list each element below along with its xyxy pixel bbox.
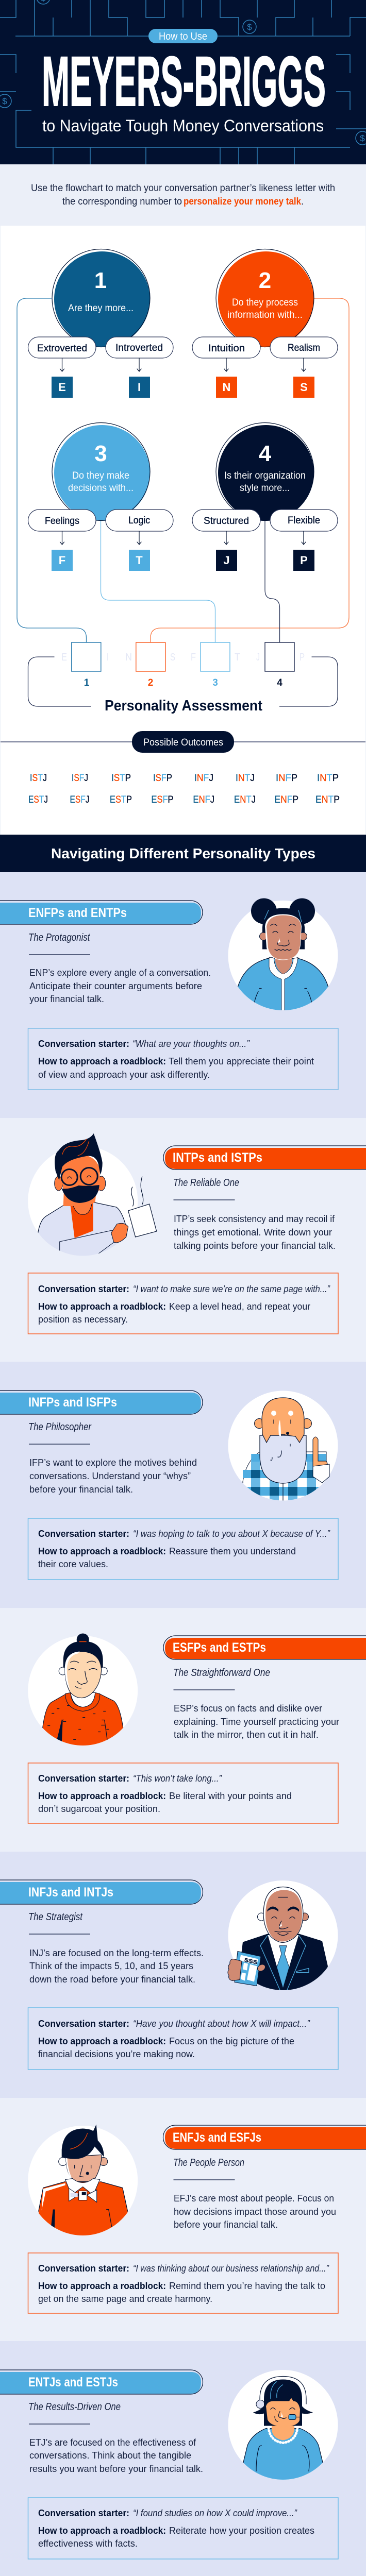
description: ETJ’s are focused on the effectiveness of (29, 2437, 196, 2448)
step 1: 1 (94, 268, 107, 293)
personality assessment: T (235, 652, 240, 663)
callout (28, 1518, 338, 1580)
callout: How to approach a roadblock: (38, 1791, 166, 1801)
subtitle: The Protagonist (28, 932, 91, 943)
connector lines (17, 298, 349, 642)
banner: ESFPs and ESTPs (173, 1640, 266, 1655)
step 2: N (223, 381, 230, 394)
personality assessment (28, 642, 338, 714)
outcomes grid: ESTJ (28, 794, 48, 805)
description (174, 1214, 336, 1251)
outcomes grid (28, 773, 340, 805)
personality assessment: S (170, 652, 175, 663)
description: talk in the mirror, then cut it in half. (174, 1730, 319, 1740)
callout: “This won’t take long...” (133, 1773, 222, 1784)
description (29, 1948, 204, 1985)
callout: don’t sugarcoat your position. (38, 1804, 160, 1814)
description (174, 1703, 339, 1740)
step 1: E (58, 381, 66, 394)
dollar signs: $ (360, 133, 365, 143)
personality assessment: Personality Assessment (105, 698, 262, 714)
description (29, 1458, 197, 1495)
outcomes grid: ISFJ (72, 773, 88, 784)
step 3: 3 (94, 441, 107, 466)
callout: Reiterate how your position creates (169, 2526, 314, 2536)
outcomes grid: INTJ (236, 773, 255, 784)
subtitle: to Navigate Tough Money Conversations (42, 116, 324, 135)
callout: How to approach a roadblock: (38, 1546, 166, 1556)
description (29, 2437, 203, 2474)
intro text: personalize your money talk (184, 196, 301, 207)
callout: Conversation starter: (38, 1529, 129, 1539)
pill: how to use (148, 29, 218, 43)
subtitle: The Straightforward One (173, 1667, 270, 1679)
step 3: F (59, 554, 65, 567)
illustration: man in suit with calculator (228, 1880, 338, 1992)
description: explaining. Time yourself practicing your (174, 1717, 339, 1727)
banner: INFJs and INTJs (28, 1885, 113, 1900)
step 1: Introverted (115, 343, 163, 353)
subtitle: The People Person (173, 2157, 244, 2168)
banner (163, 2125, 366, 2149)
personality assessment: 3 (212, 677, 218, 688)
description: ENP’s explore every angle of a conversation. (29, 968, 211, 978)
intro text (31, 183, 335, 207)
description: Think of the impacts 5, 10, and 15 years (29, 1961, 193, 1971)
intro text: . (301, 196, 304, 207)
illustration: woman with headset (228, 2370, 338, 2481)
illustration: man in suit with calculator: $$$ (243, 1957, 258, 1966)
intro text: the corresponding number to (62, 196, 182, 207)
description: how decisions impact those around you (174, 2207, 336, 2217)
callout: “Have you thought about how X will impact...” (133, 2019, 310, 2029)
callout: Conversation starter: (38, 1039, 129, 1049)
panel: ENFJs and ESFJs (0, 2098, 366, 2341)
outcomes grid: ENTJ (234, 794, 256, 805)
description: down the road before your financial talk. (29, 1974, 195, 1985)
description: before your financial talk. (174, 2219, 278, 2230)
intro text: Use the flowchart to match your conversation partner’s likeness letter with (31, 183, 335, 194)
step 4 (192, 422, 338, 571)
subtitle: The Reliable One (173, 1177, 239, 1189)
dollar signs: $ (247, 22, 252, 32)
step 3: T (136, 554, 143, 567)
dollar signs: $ (2, 96, 7, 106)
callout: “What are your thoughts on...” (132, 1039, 250, 1049)
callout: Conversation starter: (38, 2019, 129, 2029)
description: talking points before your financial talk. (174, 1241, 336, 1251)
step 2: S (300, 381, 308, 394)
description: before your financial talk. (29, 1484, 133, 1495)
step 1 (28, 249, 173, 398)
callout: position as necessary. (38, 1314, 128, 1325)
callout: Conversation starter: (38, 1773, 129, 1784)
illustration: bearded philosopher (228, 1391, 338, 1502)
possible outcomes heading: Possible Outcomes (143, 737, 223, 748)
panel: ENTJs and ESTJs (0, 2341, 366, 2576)
description: things get emotional. Write down your (174, 1227, 332, 1238)
outcomes grid: INFJ (194, 773, 213, 784)
personality assessment: E (61, 652, 67, 663)
callout: Remind them you’re having the talk to (169, 2281, 325, 2291)
banner (163, 1146, 366, 1170)
step 2: Realism (288, 343, 320, 353)
step 1: Are they more... (68, 303, 134, 314)
illustration: woman with top knot (28, 1633, 138, 1748)
description: Anticipate their counter arguments before (29, 981, 202, 991)
callout: Keep a level head, and repeat your (169, 1301, 310, 1312)
step 4: Structured (204, 516, 249, 527)
callout: How to approach a roadblock: (38, 2036, 166, 2046)
panel: ENFPs and ENTPs (0, 872, 366, 1118)
callout: Be literal with your points and (169, 1791, 292, 1801)
callout (28, 1763, 338, 1823)
callout: of view and approach your ask differently. (38, 1070, 210, 1080)
header panel (0, 0, 366, 164)
outcomes grid: ENTP (315, 794, 340, 805)
banner (0, 1880, 203, 1904)
step 3: Logic (128, 515, 150, 526)
callout: How to approach a roadblock: (38, 2526, 166, 2536)
personality assessment: 1 (84, 677, 90, 688)
step 4: Is their organization (224, 470, 306, 481)
step 1: I (138, 381, 141, 394)
outcomes grid: INFP (276, 773, 297, 784)
navigating heading band (0, 835, 366, 872)
step 2 (192, 249, 338, 398)
personality assessment: P (300, 652, 305, 663)
description: ITP’s seek consistency and may recoil if (174, 1214, 335, 1224)
step 4: style more... (240, 483, 290, 494)
callout: financial decisions you’re making now. (38, 2049, 195, 2059)
personality assessment: J (256, 652, 260, 663)
step 4: Flexible (288, 515, 320, 526)
personality assessment: F (191, 652, 196, 663)
step 2: Do they process (232, 297, 298, 308)
step 2: 2 (259, 268, 271, 293)
callout (28, 1273, 338, 1334)
step 3 (28, 422, 173, 571)
description: conversations. Think about the tangible (29, 2450, 191, 2461)
outcomes grid: ISFP (153, 773, 172, 784)
callout: “I want to make sure we’re on the same page with...” (133, 1284, 330, 1294)
callout: “I was thinking about our business relationship and...” (133, 2263, 329, 2274)
callout: “I was hoping to talk to you about X because of Y...” (133, 1529, 330, 1539)
possible outcomes heading (1, 731, 365, 753)
callout (28, 2253, 338, 2313)
step 4: P (300, 554, 308, 567)
dollar signs (2, 0, 365, 143)
outcomes grid: ESFJ (70, 794, 90, 805)
callout: Conversation starter: (38, 1284, 129, 1294)
callout: Conversation starter: (38, 2508, 129, 2518)
personality assessment: 2 (148, 677, 153, 688)
outcomes grid: ISTJ (30, 773, 47, 784)
step 3: decisions with... (68, 483, 134, 494)
description: EFJ’s care most about people. Focus on (174, 2193, 334, 2204)
description: results you want before your financial talk. (29, 2464, 203, 2474)
description (29, 968, 211, 1004)
banner (0, 2370, 203, 2394)
callout: get on the same page and create harmony. (38, 2294, 212, 2304)
step 2: information with... (227, 310, 303, 320)
callout: Tell them you appreciate their point (169, 1056, 314, 1066)
banner: ENFPs and ENTPs (28, 906, 127, 920)
banner (0, 901, 203, 924)
callout: Focus on the big picture of the (169, 2036, 294, 2046)
callout (28, 2498, 338, 2559)
panel: INFPs and ISFPs (0, 1362, 366, 1608)
callout: Conversation starter: (38, 2263, 129, 2274)
callout: How to approach a roadblock: (38, 1056, 166, 1066)
illustration: bearded man with mug (28, 1133, 157, 1263)
callout: Reassure them you understand (169, 1546, 296, 1556)
outcomes grid: ISTP (111, 773, 131, 784)
banner (0, 1391, 203, 1414)
panel: INFJs and INTJs (0, 1852, 366, 2098)
subtitle: The Results-Driven One (28, 2401, 121, 2413)
outcomes grid: INTP (317, 773, 339, 784)
banner (163, 1636, 366, 1659)
flowchart panel (0, 226, 366, 835)
illustration: woman with hair buns (228, 899, 338, 1012)
subtitle: The Philosopher (28, 1421, 92, 1433)
callout (28, 2008, 338, 2070)
description: your financial talk. (29, 994, 104, 1004)
intro band (0, 164, 366, 226)
callout: effectiveness with facts. (38, 2538, 138, 2549)
outcomes grid: ENFJ (193, 794, 214, 805)
banner: ENTJs and ESTJs (28, 2375, 118, 2389)
banner: ENFJs and ESFJs (173, 2130, 261, 2145)
outcomes grid: ESFP (152, 794, 173, 805)
step 4: J (223, 554, 230, 567)
description: IFP’s want to explore the motives behind (29, 1458, 197, 1468)
callout: their core values. (38, 1559, 108, 1569)
description: INJ’s are focused on the long-term effects. (29, 1948, 204, 1958)
step 4: 4 (259, 441, 272, 466)
callout: How to approach a roadblock: (38, 1301, 166, 1312)
personality assessment: I (107, 652, 109, 663)
step 1: Extroverted (37, 343, 87, 354)
navigating heading band: Navigating Different Personality Types (51, 845, 315, 861)
callout (28, 1028, 338, 1090)
personality assessment: N (125, 652, 132, 663)
step 2: Intuition (208, 343, 245, 354)
callout: “I found studies on how X could improve...” (133, 2508, 297, 2518)
description (174, 2193, 336, 2230)
description: ESP’s focus on facts and dislike over (174, 1703, 322, 1714)
outcomes grid: ESTP (110, 794, 132, 805)
banner: INTPs and ISTPs (173, 1150, 262, 1165)
personality assessment: 4 (277, 677, 282, 688)
step 3: Feelings (45, 516, 79, 527)
outcomes grid: ENFP (274, 794, 298, 805)
pill: how to use: How to Use (159, 31, 207, 42)
callout: How to approach a roadblock: (38, 2281, 166, 2291)
illustration: man with bow tie (28, 2125, 138, 2237)
description: conversations. Understand your “whys” (29, 1471, 191, 1481)
step 3: Do they make (72, 470, 129, 481)
maze background (0, 0, 366, 164)
subtitle: The Strategist (28, 1911, 83, 1923)
banner: INFPs and ISFPs (28, 1395, 117, 1410)
panel: ESFPs and ESTPs (0, 1608, 366, 1852)
panel: INTPs and ISTPs (0, 1118, 366, 1362)
